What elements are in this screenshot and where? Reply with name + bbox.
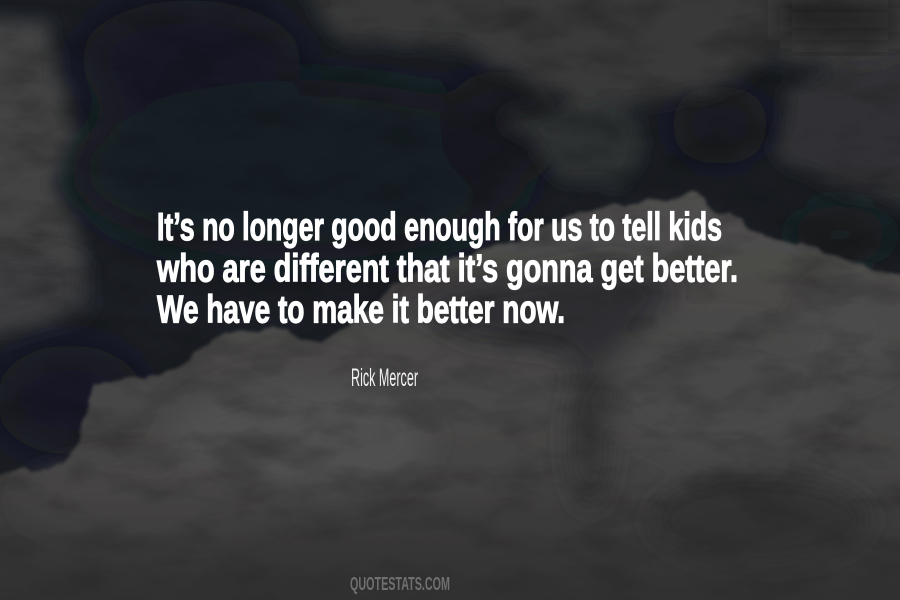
quote line 3: We have to make it better now.: [157, 288, 565, 332]
upper clouds: [0, 0, 900, 330]
watermark: QUOTESTATS.COM: [350, 574, 450, 594]
author attribution: Rick Mercer: [351, 364, 418, 392]
cumulus cloud mass: [0, 193, 900, 600]
quote text: [156, 206, 738, 332]
